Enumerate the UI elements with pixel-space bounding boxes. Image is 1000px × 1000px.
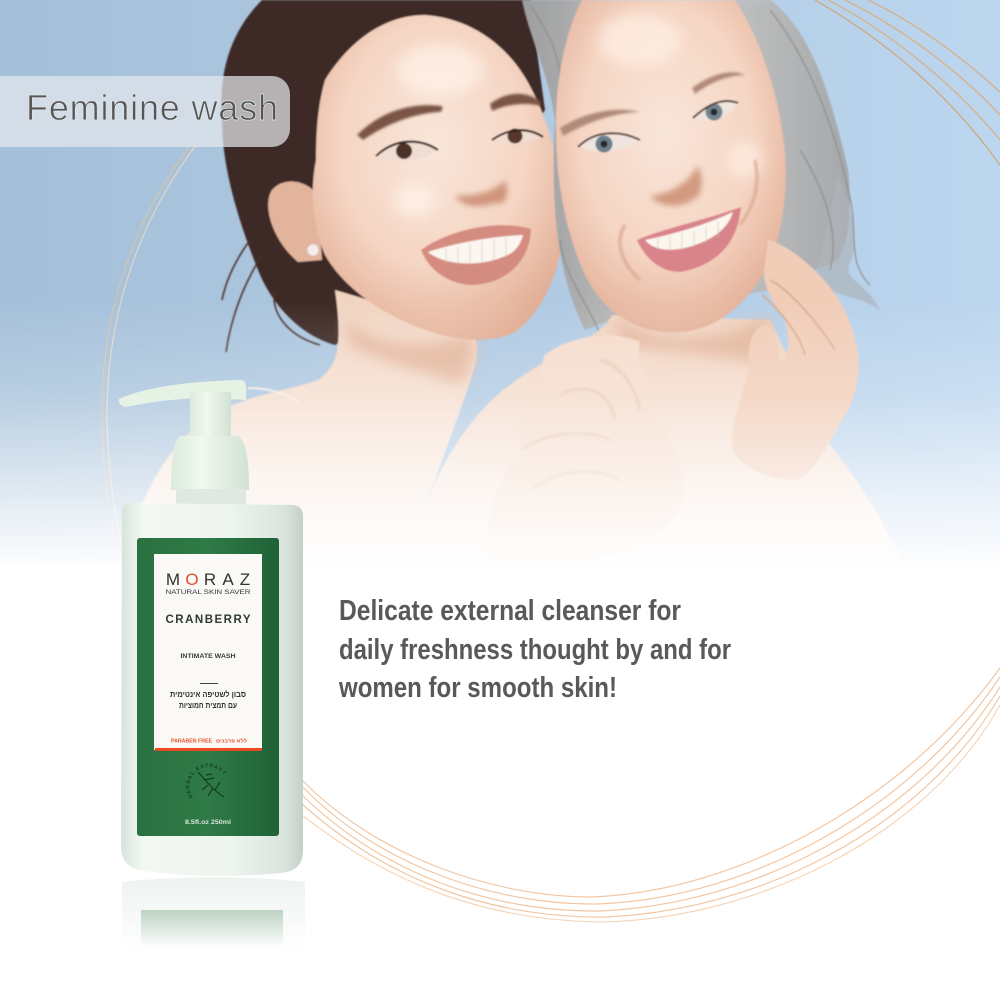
photo background: [0, 0, 1000, 562]
right woman hair: [522, 0, 850, 330]
pill title: Feminine wash: [26, 87, 278, 128]
right woman finger lines: [762, 280, 835, 355]
right woman neck and chest: [405, 315, 905, 570]
left woman lips: [421, 225, 531, 285]
label pill: [0, 76, 290, 147]
right woman nose: [650, 165, 702, 206]
right woman neck shadow: [615, 315, 770, 365]
herbal extract seal: HERBAL EXTRACT: [186, 764, 226, 798]
lower decorative circle arcs: [302, 668, 1000, 922]
right woman eyes: [578, 101, 738, 152]
green label: [137, 538, 279, 836]
right woman hair strands: [530, 5, 870, 335]
product name: CRANBERRY: [166, 614, 251, 626]
white label panel: [154, 554, 262, 750]
left woman face: [313, 15, 564, 340]
upper decorative circle arcs: [102, 0, 1000, 570]
paraben free line: ללא פרבנים: [216, 738, 247, 744]
hebrew lines: סבון לשטיפה אינטימית: [170, 690, 246, 699]
left woman strap: [248, 388, 298, 402]
bottle reflection: [122, 878, 305, 950]
right woman raised hand: [732, 240, 858, 480]
left woman cheek highlights: [393, 44, 484, 218]
right woman hair wisps: [815, 175, 880, 310]
paraben free line: PARABEN FREE: [171, 738, 213, 744]
pump collar: [171, 436, 249, 490]
left woman nose: [455, 180, 507, 206]
right woman knuckle lines: [520, 360, 640, 490]
right woman clasped hands: [485, 336, 684, 565]
left woman teeth: [428, 235, 523, 263]
orange label stripe: [155, 748, 262, 751]
left woman earring: [307, 244, 319, 256]
right woman teeth: [645, 212, 733, 250]
paraben free line: [171, 738, 247, 744]
pump nozzle: [119, 380, 246, 407]
label rule: [200, 683, 218, 684]
left woman eyes: [376, 128, 543, 161]
left woman hair wisps: [222, 240, 320, 352]
description text: daily freshness thought by and for: [339, 634, 731, 666]
right woman face: [556, 0, 786, 332]
product type: INTIMATE WASH: [180, 653, 236, 660]
brand logo: NATURAL SKIN SAVER: [166, 589, 251, 596]
right woman smile line: [620, 160, 757, 280]
description text: [338, 595, 731, 704]
left woman neck and shoulder: [125, 290, 477, 570]
pump stem: [190, 392, 231, 442]
hebrew lines: [170, 690, 246, 710]
right woman eyebrows: [560, 72, 745, 136]
photo: left woman: [125, 0, 564, 570]
left woman ear: [268, 182, 322, 262]
volume text: 8.5fl.oz 250ml: [185, 819, 231, 826]
right woman cheek highlights: [598, 14, 763, 178]
photo: right woman: [405, 0, 905, 570]
left woman neck shadow: [345, 320, 473, 385]
hebrew lines: עם תמצית חמוציות: [179, 701, 237, 710]
brand logo: M O RAZ: [166, 570, 250, 589]
bottle body: [121, 503, 303, 876]
white fade over photo: [0, 300, 1000, 572]
bottle neck: [176, 489, 246, 506]
description text: women for smooth skin!: [338, 672, 617, 704]
left woman hair back: [221, 0, 545, 345]
right woman lips: [637, 207, 741, 272]
description text: Delicate external cleanser for: [339, 595, 681, 627]
left woman eyebrows: [357, 94, 541, 140]
product bottle: [118, 380, 305, 944]
